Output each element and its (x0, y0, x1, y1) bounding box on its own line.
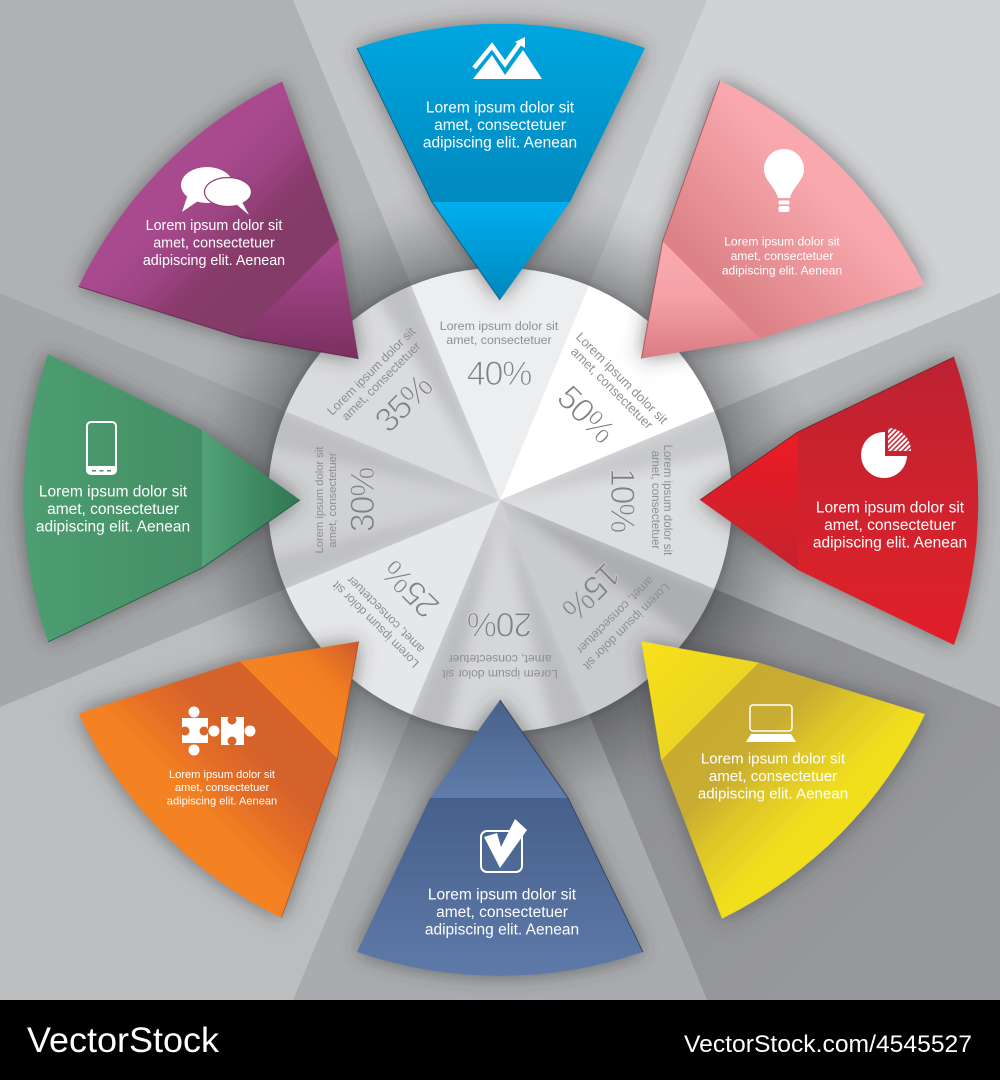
pie label 15%: 15% (554, 555, 627, 628)
pie label 10%: amet, consectetuer (649, 451, 662, 549)
panel: green wedge (24, 354, 300, 642)
pie label 10%: Lorem ipsum dolor sit (661, 445, 674, 556)
icon: checkbox (481, 819, 527, 872)
blue wedge shape (357, 24, 645, 300)
pie label 15%: amet, consectetuer (574, 574, 657, 657)
pie label 50%: 50% (549, 378, 622, 451)
navy text: adipiscing elit. Aenean (425, 922, 579, 938)
pie label 10%: 10% (603, 468, 641, 533)
pie label 25%: amet, consectetuer (344, 573, 427, 656)
panel: blue wedge (357, 24, 645, 300)
pie labels (314, 319, 674, 681)
pink wedge shape (542, 63, 942, 463)
icon: puzzle pieces (180, 706, 256, 756)
green text: Lorem ipsum dolor sit (39, 484, 188, 500)
red text (813, 500, 967, 552)
red text: Lorem ipsum dolor sit (816, 500, 965, 516)
pie label 35%: Lorem ipsum dolor sit (324, 324, 419, 418)
pie label 50%: Lorem ipsum dolor sit (573, 329, 671, 427)
pie label 40% (440, 319, 559, 393)
pie label 35%: amet, consectetuer (339, 339, 423, 423)
icon: light bulb (764, 149, 804, 212)
pie label 25%: Lorem ipsum dolor sit (329, 578, 422, 671)
pie label 10% (603, 445, 674, 556)
navy text: Lorem ipsum dolor sit (428, 886, 577, 904)
orange text: adipiscing elit. Aenean (167, 796, 277, 808)
pie label 35%: 35% (368, 367, 441, 440)
red wedge shape (700, 357, 978, 645)
pie label 20%: amet, consectetuer (449, 652, 551, 666)
green text: adipiscing elit. Aenean (36, 518, 190, 536)
pie label 25%: 25% (374, 552, 447, 625)
purple text: amet, consectetuer (153, 236, 275, 252)
pie label 25% (329, 534, 466, 671)
pie label 40%: amet, consectetuer (446, 333, 552, 347)
pie label 40%: 40% (467, 355, 532, 393)
pie label 20%: Lorem ipsum dolor sit (442, 667, 558, 681)
panel: navy wedge (357, 700, 643, 976)
blue text: adipiscing elit. Aenean (423, 134, 577, 152)
pie label 20% (442, 605, 558, 681)
green text (36, 484, 190, 536)
orange text (167, 769, 277, 808)
navy text: amet, consectetuer (436, 904, 568, 921)
panel: orange wedge (61, 537, 458, 935)
pie label 40%: Lorem ipsum dolor sit (440, 319, 559, 333)
pink text: Lorem ipsum dolor sit (724, 234, 840, 248)
red text: adipiscing elit. Aenean (813, 534, 967, 552)
purple text (143, 218, 285, 269)
footer logo: VectorStock (27, 1020, 219, 1060)
pie label 50%: amet, consectetuer (568, 344, 657, 432)
blue text (423, 100, 577, 152)
yellow text: Lorem ipsum dolor sit (701, 750, 846, 768)
pie label 20%: 20% (467, 605, 532, 643)
panel: red wedge (700, 357, 978, 645)
footer url: VectorStock.com/4545527 (684, 1031, 972, 1058)
navy text (425, 886, 579, 938)
icon: mountain chart (473, 37, 542, 79)
panel: purple wedge (61, 64, 459, 463)
icon: pie chart (861, 428, 911, 478)
pie label 15% (536, 537, 673, 673)
panel: pink wedge (542, 63, 942, 463)
pink text (722, 234, 842, 278)
yellow wedge shape (543, 536, 942, 935)
green wedge shape (24, 354, 300, 642)
blue text: Lorem ipsum dolor sit (426, 100, 575, 116)
icon: smartphone (87, 422, 116, 474)
pie label 30%: 30% (344, 467, 382, 532)
pie label 30% (314, 446, 382, 553)
footer bar (0, 1000, 1000, 1080)
green text: amet, consectetuer (47, 501, 179, 518)
orange text: Lorem ipsum dolor sit (169, 769, 275, 781)
pie label 15%: Lorem ipsum dolor sit (580, 580, 673, 673)
red text: amet, consectetuer (824, 517, 956, 534)
yellow text: amet, consectetuer (709, 768, 837, 785)
icon: speech bubbles (181, 167, 252, 215)
blue text: amet, consectetuer (434, 117, 566, 134)
pie label 35% (324, 324, 460, 459)
pie label 30%: Lorem ipsum dolor sit (314, 446, 326, 553)
centre pie circle (262, 268, 740, 740)
pie label 30%: amet, consectetuer (327, 452, 339, 548)
orange wedge shape (61, 537, 458, 935)
purple wedge shape (61, 64, 459, 463)
icon: laptop (746, 705, 796, 742)
pie label 50% (529, 329, 671, 472)
orange text: amet, consectetuer (175, 782, 269, 794)
purple text: adipiscing elit. Aenean (143, 253, 285, 269)
yellow text: adipiscing elit. Aenean (698, 786, 848, 802)
panel: yellow wedge (543, 536, 942, 935)
purple text: Lorem ipsum dolor sit (146, 218, 282, 234)
yellow text (698, 750, 848, 802)
pink text: amet, consectetuer (731, 249, 833, 263)
pink text: adipiscing elit. Aenean (722, 264, 842, 278)
navy wedge shape (357, 700, 643, 976)
